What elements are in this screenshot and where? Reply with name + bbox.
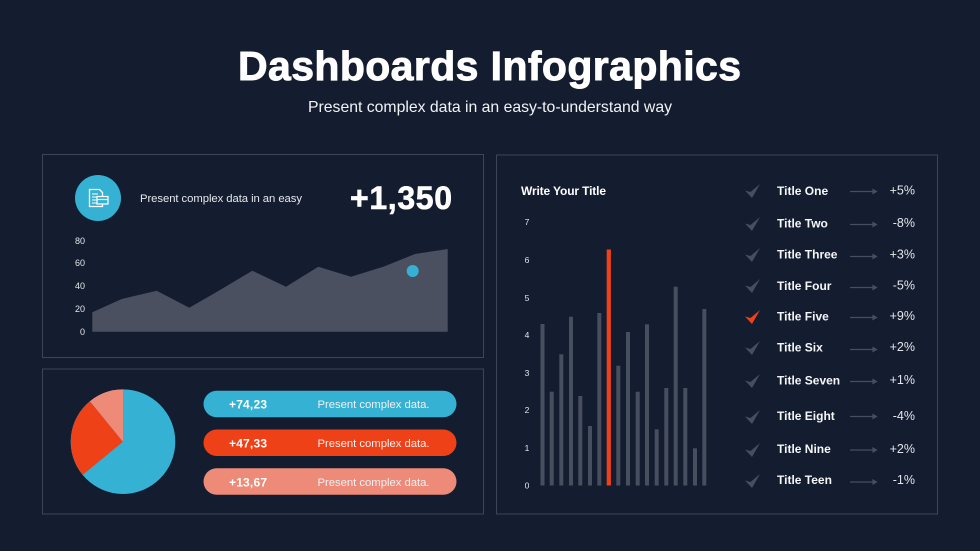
y axis labels — [75, 236, 85, 337]
bar chart y axis: 7 — [525, 217, 530, 227]
legend pill: blue — [204, 391, 456, 417]
bar chart y axis: 5 — [525, 293, 530, 303]
panel heading: Write Your Title — [521, 184, 606, 198]
list row: Title Four: Title Four — [777, 279, 832, 293]
y axis labels: 60 — [75, 258, 85, 268]
list row: Title Two: Title Two — [777, 216, 828, 230]
list row: Title Nine: Title Nine — [777, 442, 831, 456]
list row: Title Five (highlighted): Title Five — [777, 310, 829, 324]
list row: Title Three: Title Three — [777, 248, 838, 262]
bar chart y axis: 2 — [525, 405, 530, 415]
list row: Title Three: +3% — [890, 248, 915, 262]
legend pill: coral: Present complex data. — [318, 477, 430, 489]
list row: Title Six: Title Six — [777, 340, 823, 354]
legend pill: orange: +47,33 — [229, 436, 267, 450]
legend pill: orange — [204, 430, 456, 456]
list row: Title Eight: -4% — [893, 409, 915, 423]
list row: Title Seven: +1% — [890, 373, 915, 387]
bar chart — [540, 250, 706, 486]
panel: pie and legend — [42, 369, 484, 514]
list row: Title One — [745, 184, 915, 198]
list row: Title Nine — [745, 442, 915, 457]
list row: Title Five (highlighted): +9% — [890, 309, 915, 323]
list row: Title Four — [745, 278, 915, 293]
list row: Title Six — [745, 340, 915, 355]
panel description: Present complex data in an easy — [140, 193, 302, 205]
title: Dashboards Infographics — [238, 43, 741, 89]
legend pill: blue: +74,23 — [229, 398, 267, 412]
list row: Title Nine: +2% — [890, 442, 915, 456]
y axis labels: 80 — [75, 236, 85, 246]
subtitle: Present complex data in an easy-to-understand way — [308, 99, 672, 116]
bar chart y axis: 0 — [525, 480, 530, 490]
legend pill: coral: +13,67 — [229, 476, 267, 490]
y axis labels: 20 — [75, 304, 85, 314]
list row: Title Seven: Title Seven — [777, 374, 840, 388]
bar chart y axis: 4 — [525, 330, 530, 340]
list row: Title Eight — [745, 409, 915, 424]
bar chart y axis: 1 — [525, 443, 530, 453]
list row: Title Two — [745, 216, 915, 231]
list row: Title Four: -5% — [893, 278, 915, 292]
big number: +1,350 — [350, 180, 452, 216]
pie chart — [71, 389, 175, 494]
area chart — [92, 249, 448, 332]
bar chart y axis — [525, 217, 530, 490]
y axis labels: 40 — [75, 281, 85, 291]
list row: Title Teen: -1% — [893, 473, 915, 487]
highlight dot — [407, 265, 419, 277]
list row: Title Teen — [745, 473, 915, 488]
list row: Title Seven — [745, 373, 915, 388]
list row: Title Three — [745, 248, 915, 262]
icon: document in circle — [75, 175, 121, 221]
list row: Title Eight: Title Eight — [777, 409, 835, 423]
panel: area chart — [42, 154, 484, 358]
bar chart y axis: 3 — [525, 368, 530, 378]
list row: Title Teen: Title Teen — [777, 473, 832, 487]
panel: bar chart and list — [496, 155, 938, 514]
legend pill: orange: Present complex data. — [318, 438, 430, 450]
list row: Title One: +5% — [890, 184, 915, 198]
legend pill: blue: Present complex data. — [318, 399, 430, 411]
bar chart y axis: 6 — [525, 255, 530, 265]
y axis labels: 0 — [80, 327, 85, 337]
list row: Title One: Title One — [777, 184, 828, 198]
list row: Title Six: +2% — [890, 340, 915, 354]
list row: Title Two: -8% — [893, 216, 915, 230]
list row: Title Five (highlighted) — [745, 309, 915, 324]
legend pill: coral — [204, 468, 456, 495]
